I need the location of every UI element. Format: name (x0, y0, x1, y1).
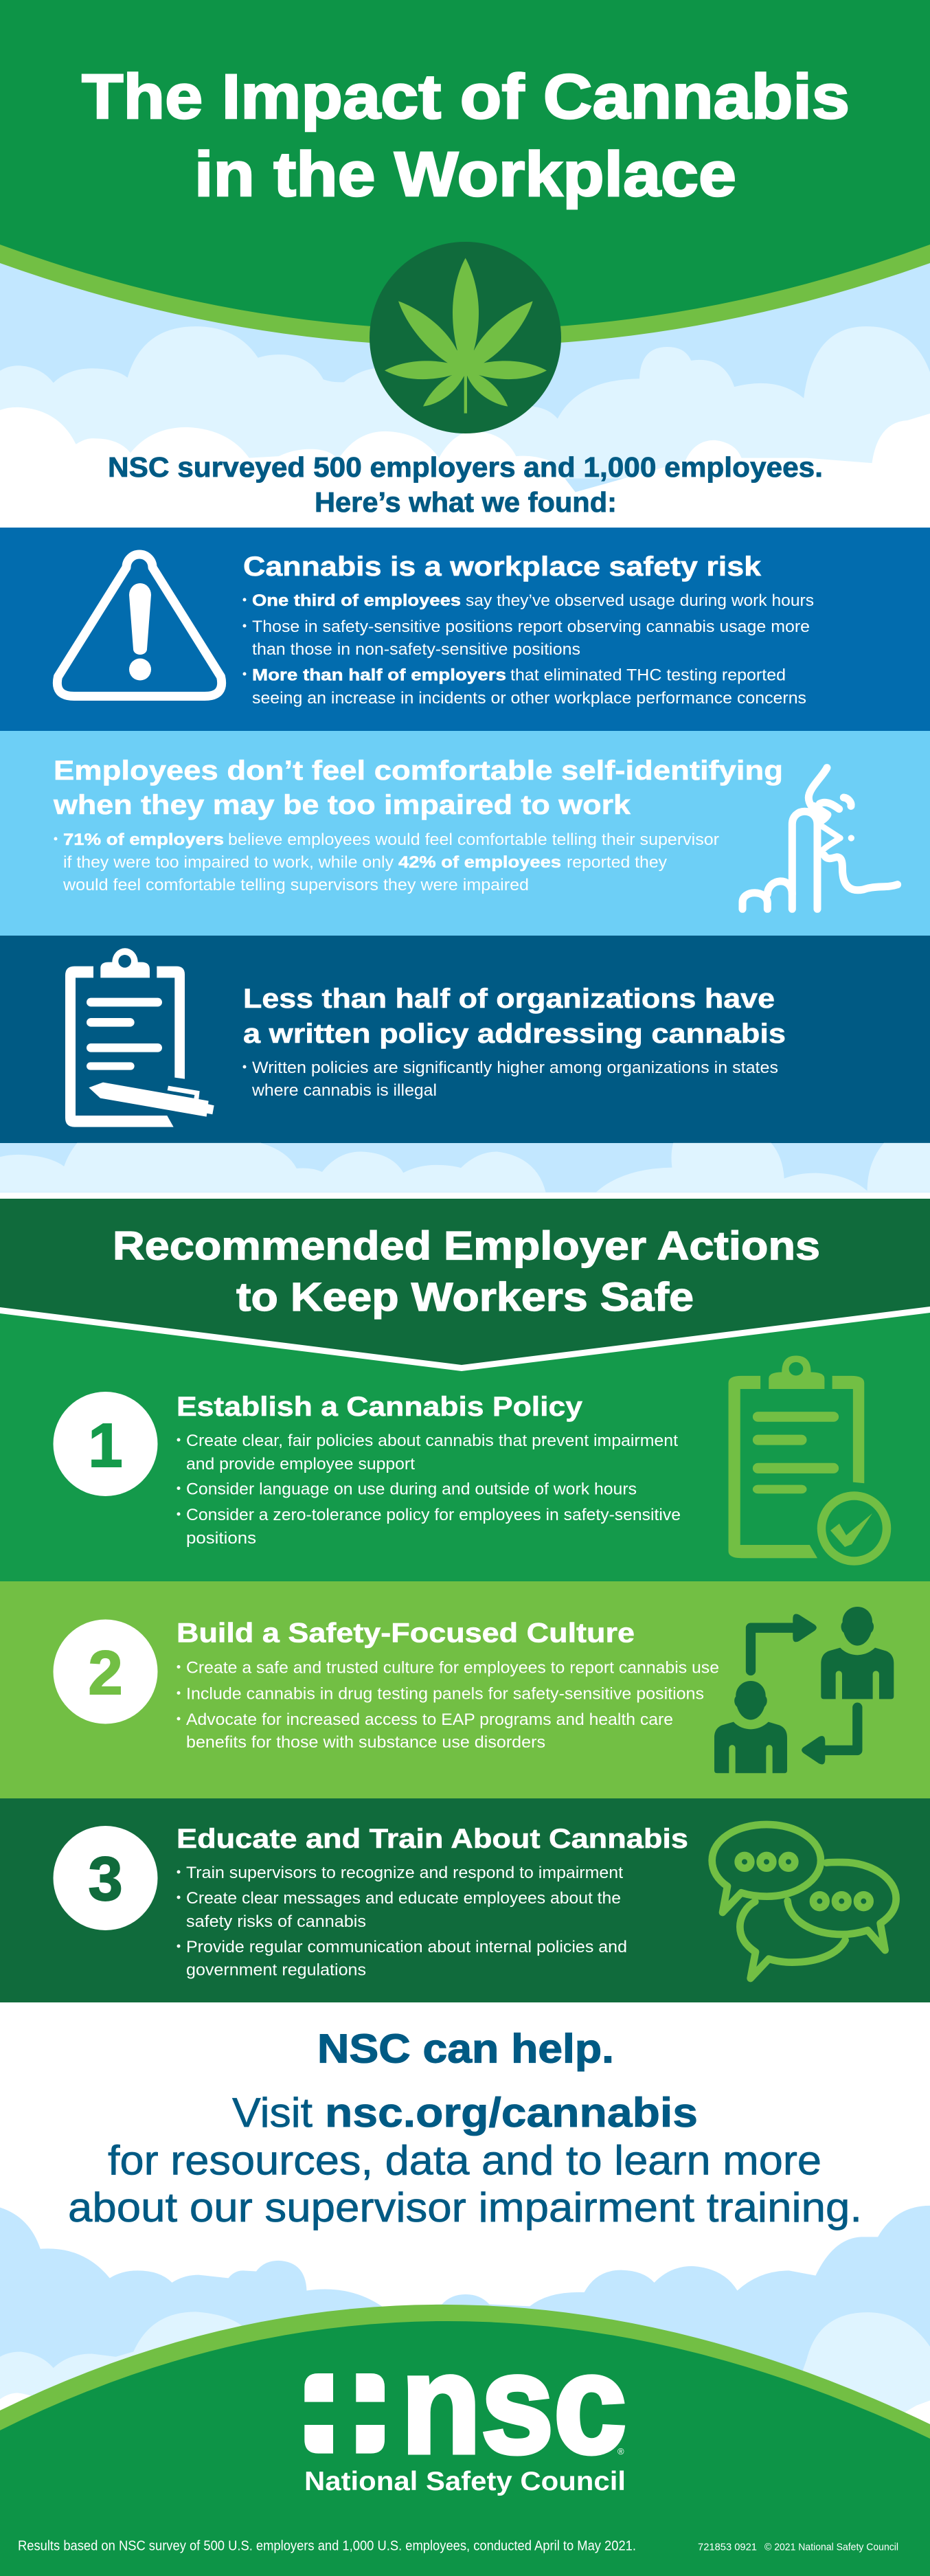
heading: written policy (243, 984, 786, 1049)
number badge 3: 3 (88, 1845, 123, 1914)
footnote: © 2021 National Safety Council (764, 2542, 898, 2553)
number badge 2: 2 (88, 1639, 123, 1708)
bullet list: step 3: Provide regular communication about internal policies and (186, 1938, 627, 1956)
panel: step 1 background (0, 1298, 930, 1581)
title: in the Workplace (194, 139, 736, 210)
step 3: educate and train (0, 1798, 930, 2002)
organisation name: National Safety Council (304, 2467, 626, 2496)
heading: recommended actions (113, 1224, 820, 1320)
call to action: NSC can help (68, 2026, 862, 2230)
call to action: NSC can help: Visit (232, 2090, 313, 2136)
bullet list: step 2: Include cannabis in drug testing panels for safety-sensitive positions (186, 1684, 704, 1704)
bullet list: step 1 (177, 1432, 681, 1548)
bullet list: safety risk: say they’ve observed usage during work hours (466, 591, 814, 610)
bullet list: step 3: Train supervisors to recognize and respond to impairment (186, 1864, 623, 1882)
call to action: NSC can help: for resources, data and to learn more (108, 2138, 821, 2184)
number badge 2 (54, 1620, 158, 1724)
bullet list: safety risk: that eliminated THC testing reported (510, 666, 786, 684)
survey intro text: Here’s what we found: (315, 486, 617, 518)
bullet list: self-identifying: believe employees would feel comfortable telling their supervisor (228, 831, 719, 849)
cloud band between sections (0, 1143, 930, 1193)
bullet list: step 2 (177, 1658, 719, 1752)
heading: safety risk: Cannabis is a workplace safety risk (243, 552, 762, 582)
icon: clipboard with checkmark (729, 1355, 887, 1561)
heading: written policy: a written policy addressing cannabis (243, 1019, 786, 1049)
bullet list: step 3: government regulations (186, 1961, 366, 1980)
step 1: establish a policy (54, 1355, 887, 1561)
bullet list: step 2: benefits for those with substance use disorders (186, 1733, 545, 1752)
icon: impaired figure squiggle (742, 768, 898, 909)
bullet list: written policy (243, 1059, 778, 1100)
number badge 1: 1 (88, 1412, 123, 1480)
icon: cannabis leaf badge (370, 242, 561, 433)
bullet list: safety risk: More than half of employers (252, 666, 506, 684)
title (82, 62, 850, 210)
registered mark: ® (617, 2446, 624, 2456)
bullet list: written policy: where cannabis is illegal (251, 1081, 437, 1100)
heading: self-identifying: when they may be too impaired to work (53, 790, 631, 820)
heading: written policy: Less than half of organizations have (243, 984, 775, 1014)
bullet list: step 1: Consider a zero-tolerance policy for employees in safety-sensitive (186, 1506, 681, 1524)
bullet list: self-identifying: 71% of employers (63, 831, 224, 849)
heading: recommended actions: Recommended Employer Actions (113, 1224, 820, 1268)
bullet list: safety risk (243, 591, 814, 708)
survey intro text: NSC surveyed 500 employers and 1,000 employees. (108, 451, 823, 483)
bullet list: step 2: Advocate for increased access to EAP programs and health care (186, 1710, 673, 1729)
bullet list: written policy: Written policies are significantly higher among organizations in states (252, 1059, 778, 1077)
bullet list: step 1: and provide employee support (186, 1455, 415, 1473)
bullet list: safety risk: seeing an increase in incidents or other workplace performance concerns (252, 689, 806, 708)
footnote: Results based on NSC survey of 500 U.S. employers and 1,000 U.S. employees, conducted April to May 2021. (18, 2539, 636, 2554)
panel: written policy (0, 936, 930, 1143)
footer green arc (0, 2305, 930, 2576)
bullet list: self-identifying: would feel comfortable telling supervisors they were impaired (63, 876, 529, 894)
bullet list: safety risk: One third of employees (252, 591, 461, 610)
title: The Impact of Cannabis (82, 62, 850, 132)
heading: recommended actions: to Keep Workers Safe (236, 1275, 694, 1320)
call to action: NSC can help: about our supervisor impairment training. (68, 2184, 862, 2230)
icon: clipboard and pen (65, 948, 214, 1127)
bullet list: step 3: Create clear messages and educate employees about the (186, 1889, 621, 1908)
icon: logo cross (304, 2373, 385, 2454)
bullet list: step 2: Create a safe and trusted culture for employees to report cannabis use (186, 1658, 719, 1677)
survey intro text (108, 451, 823, 518)
bullet list: self-identifying (54, 831, 719, 894)
bullet list: step 1: Create clear, fair policies about cannabis that prevent impairment (186, 1432, 678, 1450)
bullet list: self-identifying: if they were too impaired to work, while only (63, 853, 394, 872)
recommended actions header banner (0, 1198, 930, 1371)
bullet list: step 1: positions (186, 1529, 256, 1548)
logo wordmark: nsc (401, 2325, 626, 2483)
call to action: NSC can help: NSC can help. (317, 2026, 614, 2072)
number badge 3 (54, 1826, 158, 1930)
bullet list: self-identifying: reported they (567, 853, 667, 872)
top sky and clouds background (0, 234, 930, 533)
bullet list: step 3 (177, 1864, 627, 1980)
heading: step 2: Build a Safety-Focused Culture (177, 1618, 635, 1649)
panel: workplace safety risk (0, 528, 930, 731)
step 2: safety-focused culture (0, 1581, 930, 1798)
bottom clouds (0, 2206, 930, 2459)
heading: self-identifying (53, 756, 783, 820)
header green arc (0, 0, 930, 346)
bullet list: step 1: Consider language on use during and outside of work hours (186, 1480, 637, 1499)
heading: self-identifying: Employees don’t feel comfortable self-identifying (54, 756, 783, 786)
call to action: NSC can help: nsc.org/cannabis (325, 2090, 698, 2136)
heading: step 3: Educate and Train About Cannabis (177, 1824, 688, 1854)
bullet list: self-identifying: 42% of employees (398, 853, 561, 872)
bullet list: safety risk: Those in safety-sensitive positions report observing cannabis usage more (252, 618, 810, 636)
number badge 1 (54, 1392, 158, 1496)
bullet list: safety risk: than those in non-safety-sensitive positions (252, 640, 580, 659)
heading: step 1: Establish a Cannabis Policy (177, 1392, 583, 1422)
icon: warning triangle (57, 554, 222, 697)
panel: self-identifying impairment (0, 731, 930, 936)
NSC logo (304, 2325, 626, 2496)
footnote: 721853 0921 (698, 2542, 757, 2553)
icon: two people with arrows (714, 1607, 894, 1773)
bullet list: step 3: safety risks of cannabis (186, 1912, 366, 1931)
icon: chat bubbles (712, 1824, 896, 1978)
